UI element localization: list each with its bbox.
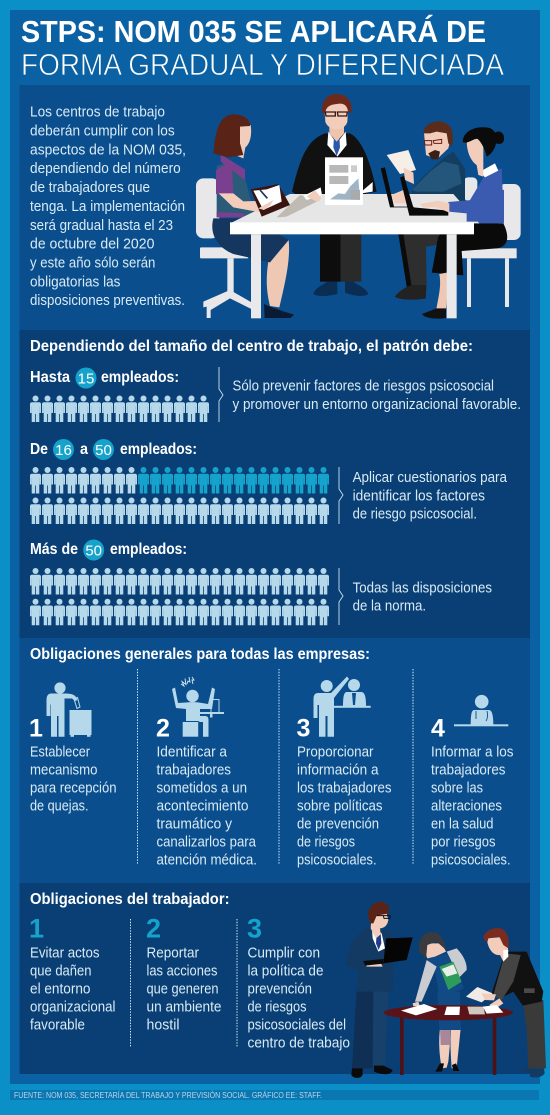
- worker obligation 3: psicosociales del: [248, 1017, 346, 1033]
- obligation 2: atención médica.: [156, 853, 257, 869]
- obligation 2: traumático y: [156, 817, 233, 833]
- worker obligation 3: centro de trabajo: [248, 1035, 350, 1051]
- worker obligation 3: 3: [247, 913, 262, 943]
- tier: up to 15 employees: 15: [78, 370, 94, 388]
- obligation 4: alteraciones: [431, 799, 502, 815]
- intro text: dependiendo del número: [30, 161, 181, 177]
- tier: more than 50 employees: Todas las disposiciones: [353, 581, 492, 597]
- tier: more than 50 employees: [30, 540, 492, 625]
- worker obligation 2: Reportar: [146, 945, 199, 961]
- source footer: [10, 1090, 539, 1100]
- obligation 1: mecanismo: [30, 763, 98, 779]
- obligation 4: trabajadores: [431, 763, 506, 779]
- notebook: [251, 184, 290, 217]
- heading: general obligations: Obligaciones generales para todas las empresas:: [30, 646, 370, 663]
- obligation 4: [431, 695, 514, 869]
- worker obligation 1: que dañen: [30, 963, 92, 979]
- laptops: [381, 167, 448, 216]
- left woman: [212, 114, 294, 318]
- icon: stressed worker at laptop: [172, 677, 224, 737]
- center man's hands: [303, 182, 373, 202]
- tier: 16 to 50 employees: identificar los factores: [353, 488, 485, 504]
- right chair: [457, 177, 521, 307]
- intro text: [30, 105, 186, 309]
- worker obligation 3: de riesgos: [248, 999, 306, 1015]
- obligation 2: acontecimiento: [156, 799, 248, 815]
- intro text: Los centros de trabajo: [30, 105, 165, 121]
- worker obligation 2: 2: [146, 913, 161, 943]
- man leaning over table: [466, 928, 546, 1078]
- intro text: obligatorias las: [30, 274, 120, 290]
- obligation 3: información a: [297, 763, 379, 779]
- worker obligation 1: 1: [29, 913, 44, 943]
- tier: up to 15 employees: Hasta: [30, 369, 70, 386]
- round table: [384, 1004, 513, 1075]
- heading: worker obligations: Obligaciones del trabajador:: [30, 891, 230, 908]
- obligation 4: en la salud: [431, 817, 494, 833]
- center man: [292, 94, 377, 296]
- icon: doctor at desk: [454, 695, 508, 726]
- worker obligation 2: [146, 913, 222, 1033]
- right woman: [422, 127, 507, 319]
- worker obligation 1: el entorno: [30, 981, 90, 997]
- obligation 2: [156, 677, 257, 869]
- obligation 4: Informar a los: [431, 745, 514, 761]
- tier: up to 15 employees: [30, 367, 521, 422]
- worker obligation 3: Cumplir con: [248, 945, 320, 961]
- number 3: 3: [296, 715, 310, 743]
- panel: introduction: [20, 85, 530, 330]
- tier: up to 15 employees: Sólo prevenir factores de riesgos psicosocial: [232, 379, 494, 395]
- heading: size section: Dependiendo del tamaño del centro de trabajo, el patrón debe:: [30, 338, 473, 355]
- tier: 16 to 50 employees: [30, 439, 508, 524]
- tier: more than 50 employees: de la norma.: [353, 599, 426, 615]
- tier: 16 to 50 employees: empleados:: [120, 441, 197, 458]
- worker obligation 1: [29, 913, 116, 1033]
- obligation 1: para recepción: [30, 781, 116, 797]
- right woman's sleeve: [420, 187, 504, 222]
- tier: 16 to 50 employees: a: [80, 441, 88, 458]
- obligation 2: canalizarlos para: [156, 835, 257, 851]
- illustration: three colleagues at a round table: [346, 902, 546, 1078]
- number 2: 2: [156, 715, 170, 743]
- intro text: será gradual hasta el 23: [30, 218, 173, 234]
- icon: person pointing at seated colleague: [314, 676, 371, 737]
- obligation 3: [296, 676, 392, 869]
- panel: general obligations: [20, 638, 530, 883]
- worker obligation 3: prevención: [248, 981, 312, 997]
- illustration: meeting at a table: [196, 94, 521, 319]
- obligation 3: sobre políticas: [297, 799, 382, 815]
- tier: 16 to 50 employees: 50: [95, 442, 112, 459]
- panel: employer duties by size: [20, 330, 530, 638]
- obligation 2: sometidos a un: [156, 781, 247, 797]
- tier: up to 15 employees: empleados:: [101, 369, 179, 386]
- worker obligation 3: la política de: [248, 963, 324, 979]
- tier: 16 to 50 employees: de riesgo psicosocial.: [353, 507, 477, 523]
- obligation 3: psicosociales.: [297, 853, 376, 869]
- report sheet: [325, 157, 363, 205]
- number 4: 4: [431, 715, 445, 743]
- tier: 16 to 50 employees: Aplicar cuestionarios para: [353, 470, 508, 486]
- intro text: deberán cumplir con los: [30, 124, 175, 140]
- obligation 1: Establecer: [30, 745, 90, 761]
- obligation 3: de riesgos: [297, 835, 355, 851]
- tier: 16 to 50 employees: 16: [55, 442, 72, 459]
- title: FORMA GRADUAL Y DIFERENCIADA: [21, 47, 504, 82]
- obligation 1: [29, 682, 116, 815]
- worker obligation 2: las acciones: [146, 963, 218, 979]
- left chair: [196, 178, 253, 318]
- worker obligation 2: un ambiente: [146, 999, 222, 1015]
- obligation 3: Proporcionar: [297, 745, 374, 761]
- worker obligation 1: favorable: [30, 1017, 85, 1033]
- tier: more than 50 employees: 50: [85, 542, 102, 560]
- obligation 3: los trabajadores: [297, 781, 392, 797]
- obligation 4: por riesgos: [431, 835, 496, 851]
- worker obligation 1: organizacional: [30, 999, 116, 1015]
- obligation 2: trabajadores: [156, 763, 231, 779]
- man with laptop: [346, 902, 413, 1078]
- panel: worker obligations: [20, 883, 546, 1078]
- number 1: 1: [29, 715, 43, 743]
- woman with folders: [413, 932, 467, 1072]
- tier: more than 50 employees: empleados:: [110, 541, 187, 558]
- tier: 16 to 50 employees: De: [30, 441, 48, 458]
- icon: person with suitcase: [46, 682, 92, 737]
- tier: more than 50 employees: Más de: [30, 541, 78, 558]
- intro text: de trabajadores que: [30, 180, 150, 196]
- worker obligation 1: Evitar actos: [30, 945, 100, 961]
- obligation 4: psicosociales.: [431, 853, 510, 869]
- worker obligation 2: que generen: [146, 981, 218, 997]
- obligation 3: de prevención: [297, 817, 379, 833]
- intro text: y este año sólo serán: [30, 256, 155, 272]
- worker obligation 2: hostil: [146, 1017, 180, 1033]
- intro text: de octubre del 2020: [30, 237, 154, 253]
- obligation 2: Identificar a: [156, 745, 228, 761]
- title: STPS: NOM 035 SE APLICARÁ DE: [21, 14, 486, 49]
- source footer: FUENTE: NOM 035, SECRETARÍA DEL TRABAJO Y PREVISIÓN SOCIAL. GRÁFICO EE: STAFF.: [14, 1091, 322, 1100]
- left woman's arm: [219, 193, 273, 212]
- intro text: tenga. La implementación: [30, 199, 185, 215]
- table: [230, 194, 479, 318]
- tier: up to 15 employees: y promover un entorno organizacional favorable.: [232, 397, 521, 413]
- title: [21, 14, 504, 82]
- obligation 4: sobre las: [431, 781, 483, 797]
- worker obligation 3: [247, 913, 350, 1051]
- obligation 1: de quejas.: [30, 799, 88, 815]
- intro text: aspectos de la NOM 035,: [30, 142, 186, 158]
- right man: [387, 121, 465, 300]
- intro text: disposiciones preventivas.: [30, 293, 185, 309]
